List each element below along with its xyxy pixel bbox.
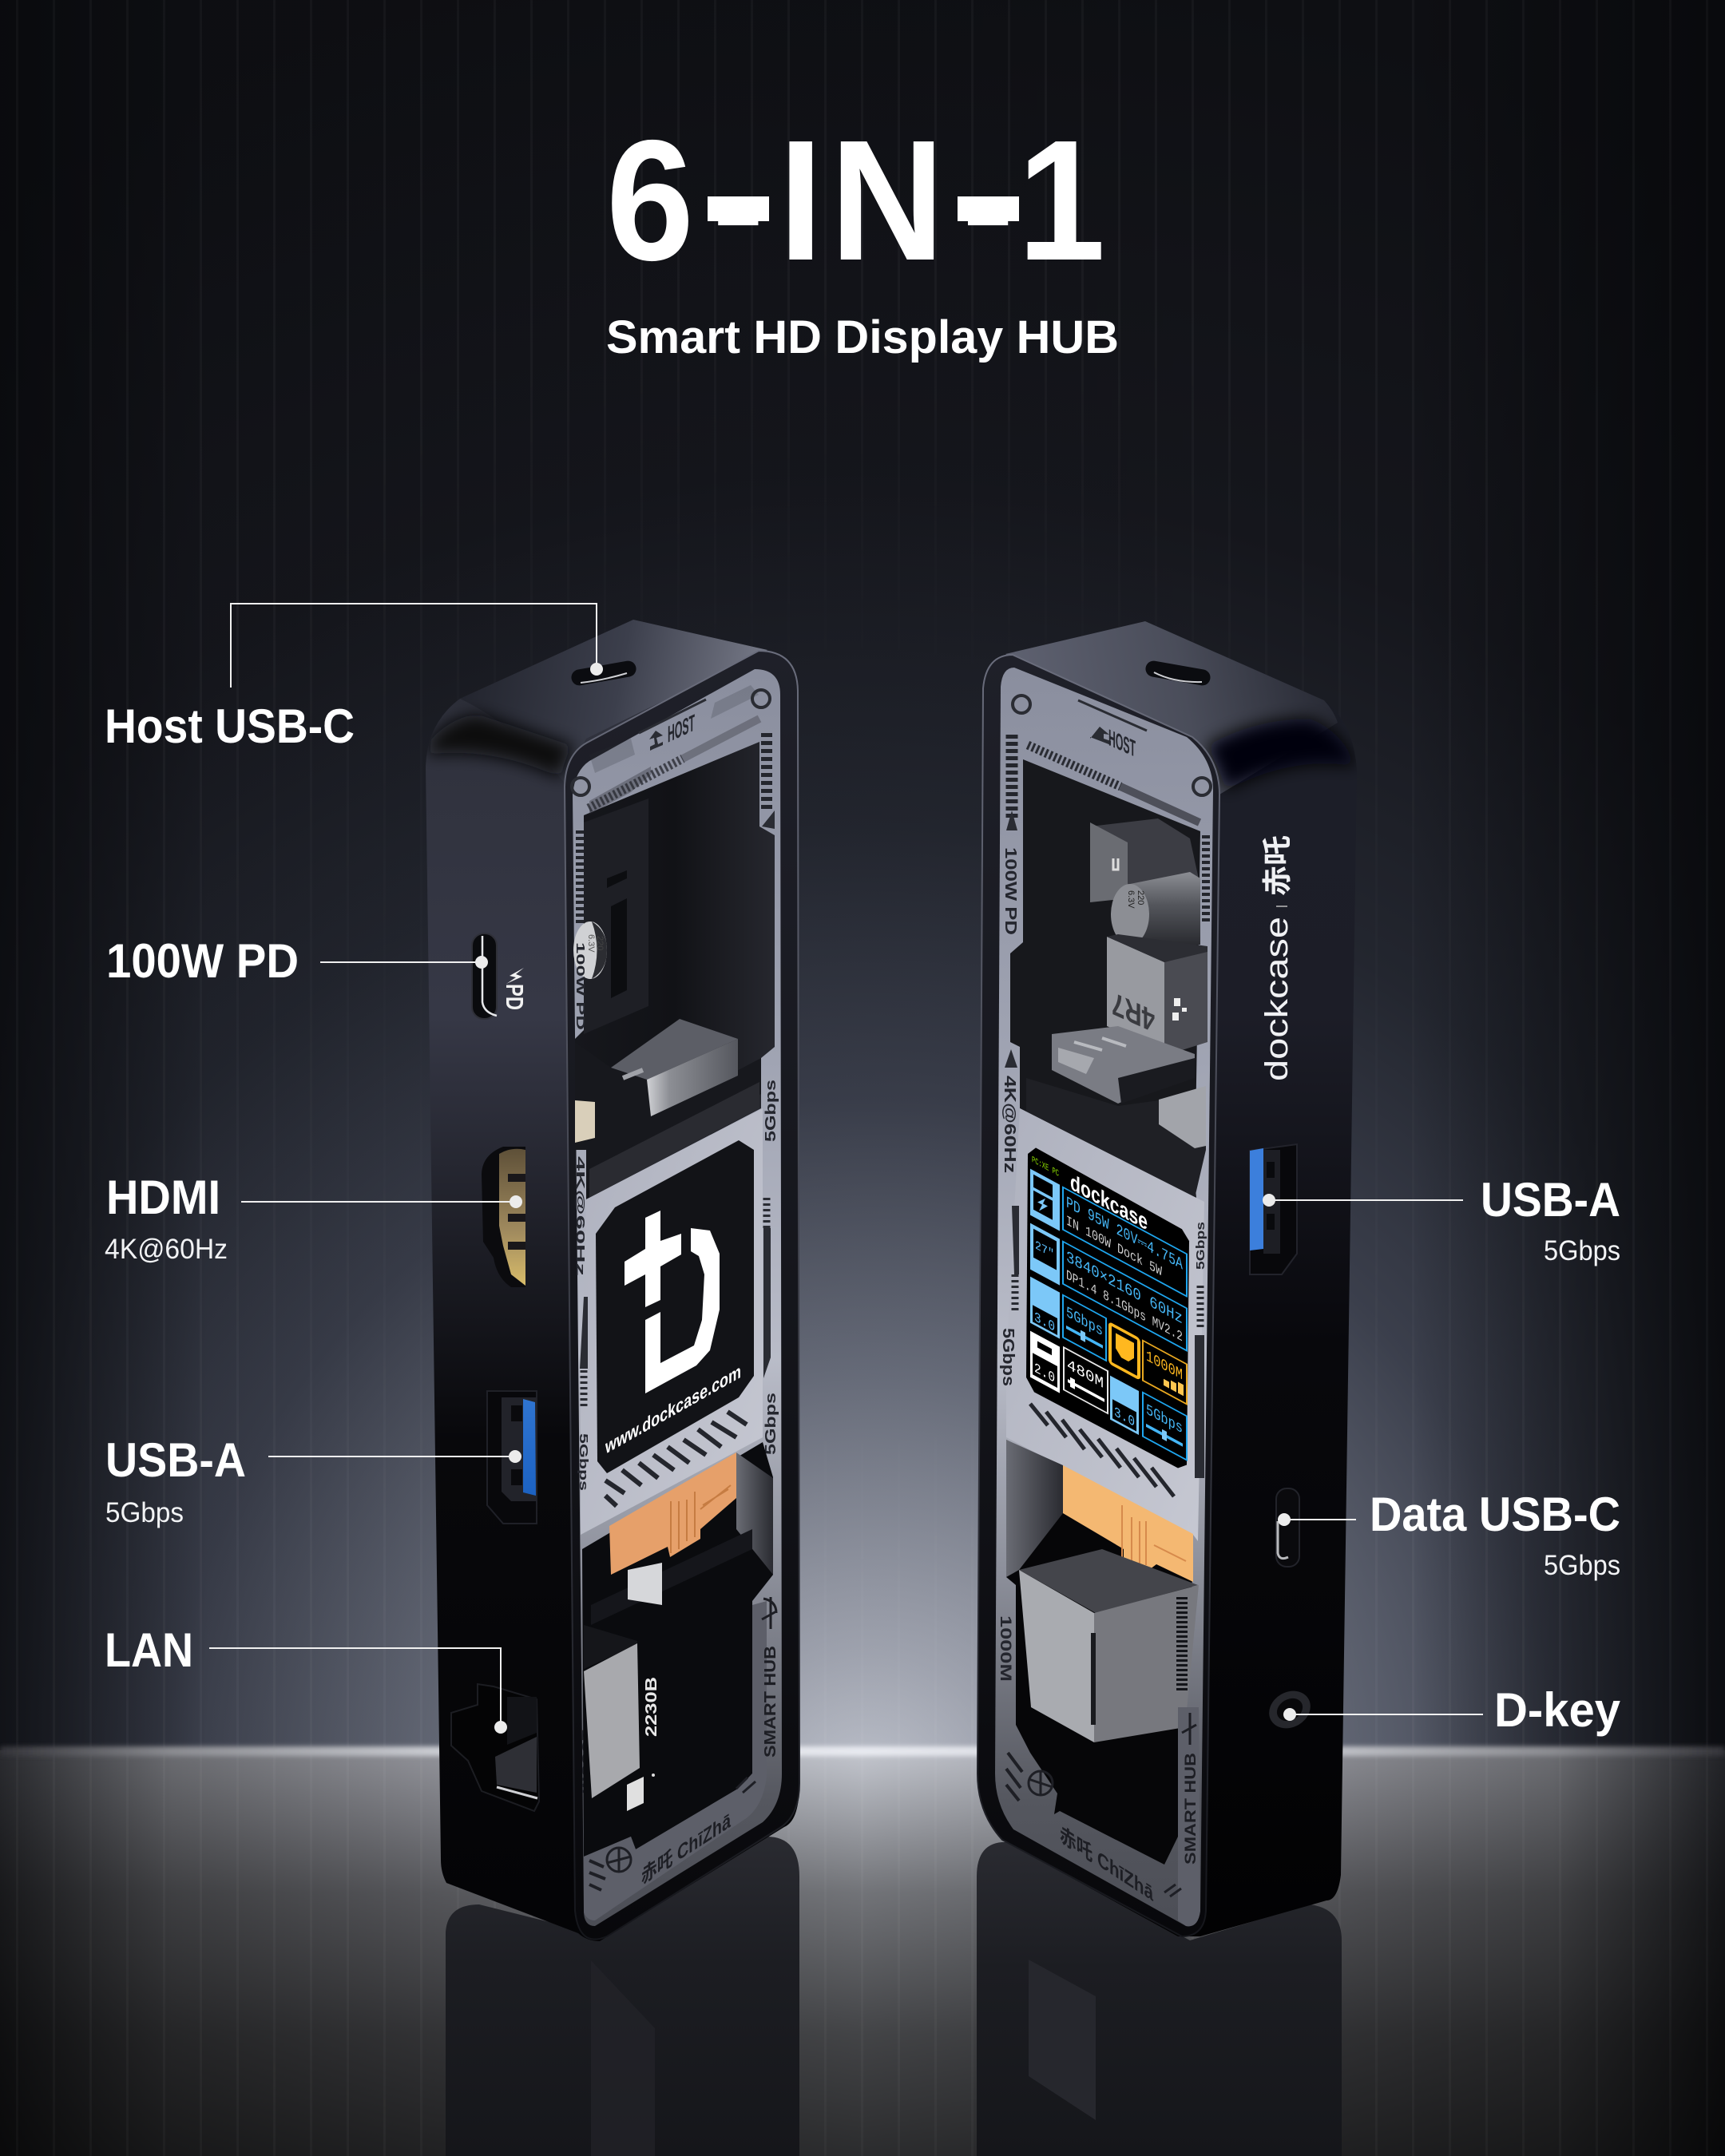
display panel: DP1.4 8.1Gbps MV2.2: [1066, 1268, 1183, 1346]
callout: Host USB-C: Host USB-C: [105, 700, 355, 753]
power panel: PD 95W 20V⎓4.75A: [1066, 1194, 1183, 1274]
plate hatch: [1030, 1404, 1174, 1496]
lan panel: [1143, 1341, 1187, 1404]
title: 6-IN-1: [606, 104, 1105, 296]
port: host USB-C: [570, 660, 637, 687]
front rim: [978, 655, 1219, 1936]
floor: [0, 1746, 1725, 2156]
frame text: side labels: 5Gbps: [763, 1080, 779, 1142]
frame text: side labels: 4K@60Hz: [573, 1156, 587, 1276]
frame text: side labels: 100W PD: [573, 942, 587, 1030]
callout: Data USB-C: 5Gbps: [1544, 1550, 1620, 1581]
frame text: side labels: 5Gbps: [1194, 1222, 1208, 1270]
pcb and components: [573, 799, 648, 1034]
frame text: chizha and smart hub: [1060, 1713, 1200, 1907]
rj45 block: 2230B: [643, 1677, 660, 1737]
callout: Host USB-C: [105, 604, 603, 753]
body: left side and top: [426, 620, 799, 1941]
port: 100W PD: [472, 933, 529, 1019]
white connector: [628, 1563, 662, 1605]
callout: 100W PD: 100W PD: [106, 934, 299, 988]
frame text: chizha and smart hub: SMART HUB: [762, 1646, 779, 1758]
callout: LAN: LAN: [105, 1623, 193, 1677]
reflection: right hub: [977, 1842, 1342, 2156]
tile: usb 2.0: 2.0: [1034, 1361, 1055, 1387]
callout: Data USB-C: [1278, 1488, 1620, 1581]
frame text: side labels: 1000M: [580, 1729, 592, 1794]
frame text: side labels: 5Gbps: [763, 1393, 779, 1455]
pcb and components: 220: [595, 936, 605, 950]
silver connector: [575, 1019, 761, 1198]
tile: usb 2.0: [1030, 1331, 1060, 1393]
frame details: [1005, 696, 1211, 1068]
inner frame: [995, 668, 1213, 1926]
port: USB-A: [487, 1391, 537, 1524]
brand: dockcase: [1070, 1169, 1148, 1236]
black screen: [596, 1140, 754, 1473]
port: HDMI: [482, 1147, 525, 1287]
smart display screen: [1026, 1143, 1189, 1476]
display plate with logo: [580, 1108, 771, 1535]
frame text: chizha and smart hub: [641, 1597, 779, 1889]
callout: 100W PD: [106, 934, 488, 988]
body: right side and top: [978, 621, 1357, 1936]
usb speed panel: 5Gbps: [1066, 1304, 1103, 1341]
tile: power: [1030, 1169, 1060, 1231]
left hub: HOST: [668, 709, 695, 748]
logo mark: [625, 1211, 720, 1393]
frame text: side labels: 4K@60Hz: [1001, 1076, 1018, 1173]
website: www.dockcase.com: [605, 1361, 741, 1459]
usb speed panel: [1063, 1295, 1106, 1361]
frame text: side labels: 5Gbps: [999, 1328, 1017, 1386]
frame text: side labels: 100W PD: [1001, 847, 1019, 935]
lan tile: [1110, 1324, 1139, 1378]
lower cavity: [1006, 1440, 1193, 1865]
frame text: chizha and smart hub: SMART HUB: [1183, 1753, 1200, 1865]
upper cavity: [575, 742, 775, 1199]
usb speed panel 2: 5Gbps: [1146, 1401, 1183, 1438]
usb 3.0 tile: [1110, 1376, 1139, 1435]
frame text: chizha and smart hub: 赤吒 ChīZhā: [1060, 1822, 1154, 1907]
frame text: chizha and smart hub: 赤吒 ChīZhā: [641, 1808, 732, 1889]
front rim: [565, 651, 799, 1940]
callout: USB-A left: USB-A: [105, 1433, 246, 1487]
usb speed panel 2: [1143, 1393, 1187, 1460]
components: inductor, capacitor, connector: 220: [1136, 890, 1145, 905]
usb 3.0 tile: 3.0: [1114, 1405, 1135, 1431]
components: inductor, capacitor, connector: 4R7: [1112, 985, 1155, 1040]
tile: monitor: [1030, 1223, 1060, 1286]
display panel: 3840×2160 60Hz: [1066, 1248, 1183, 1329]
hatch: [605, 1412, 747, 1506]
frame text: HOST: [1090, 724, 1136, 763]
callout: USB-A right: USB-A: [1481, 1173, 1620, 1227]
tile: usb 3.0: 3.0: [1034, 1310, 1055, 1336]
callout: USB-A right: [1263, 1173, 1620, 1266]
power panel: IN 100W Dock 5W: [1066, 1214, 1162, 1280]
brand print: 赤吒: [1261, 835, 1294, 896]
port: D-key button: [1263, 1683, 1317, 1736]
tile: usb 3.0: [1030, 1277, 1060, 1339]
port: data USB-C: [1276, 1488, 1299, 1567]
callout: HDMI: 4K@60Hz: [105, 1234, 228, 1265]
frame text: side labels: 1000M: [997, 1615, 1013, 1682]
callout: HDMI: HDMI: [106, 1171, 220, 1224]
brand print: dockcase: [1259, 917, 1295, 1081]
subtitle: Smart HD Display HUB: [606, 311, 1119, 363]
frame text: side labels: 5Gbps: [577, 1433, 590, 1491]
lower cavity: [582, 1442, 773, 1857]
frame text: side labels: [573, 942, 779, 1794]
callout: USB-A right: 5Gbps: [1544, 1235, 1620, 1266]
right hub: HOST: [1108, 724, 1136, 763]
upper cavity: [1010, 759, 1200, 1198]
frame: bottom band: [1006, 1707, 1200, 1926]
orange flex cable: [1063, 1465, 1193, 1582]
reflection: left hub: [446, 1837, 799, 2156]
callout: D-key: D-key: [1494, 1683, 1621, 1737]
callout: D-key: [1283, 1683, 1621, 1737]
frame text: side labels: [997, 847, 1208, 1682]
pcb and components: 6.3V: [586, 934, 596, 953]
display plate: [1006, 1108, 1204, 1541]
left hub: [426, 620, 799, 1941]
port: host USB-C: [1144, 660, 1211, 687]
brand print: [1259, 835, 1295, 1081]
tile: monitor: 27": [1035, 1239, 1054, 1262]
callout: HDMI: [105, 1171, 522, 1265]
inner frame: [573, 669, 782, 1926]
right hub: [978, 621, 1357, 1936]
rj45 block: [1019, 1549, 1199, 1742]
port: LAN: [451, 1684, 539, 1811]
components: inductor, capacitor, connector: [1026, 818, 1208, 1198]
frame text: HOST: [649, 709, 695, 751]
components: inductor, capacitor, connector: 6.3V: [1126, 890, 1136, 909]
lan panel: 1000M: [1146, 1348, 1183, 1385]
usb 2.0 panel: 480M: [1067, 1357, 1104, 1393]
port: USB-A: [1250, 1144, 1297, 1274]
orange flex cable: [609, 1453, 736, 1575]
callout: USB-A left: 5Gbps: [105, 1497, 184, 1528]
usb 2.0 panel: [1064, 1347, 1108, 1413]
callout: USB-A left: [105, 1433, 521, 1528]
callout: Data USB-C: Data USB-C: [1370, 1488, 1620, 1541]
status text: PC:XE PC: [1032, 1154, 1059, 1179]
callout: LAN: [105, 1623, 507, 1734]
rj45 block: [584, 1625, 660, 1811]
frame: bottom band: [584, 1601, 767, 1920]
port: 100W PD: PD: [501, 984, 529, 1010]
screw holes and frame details: [572, 685, 775, 926]
